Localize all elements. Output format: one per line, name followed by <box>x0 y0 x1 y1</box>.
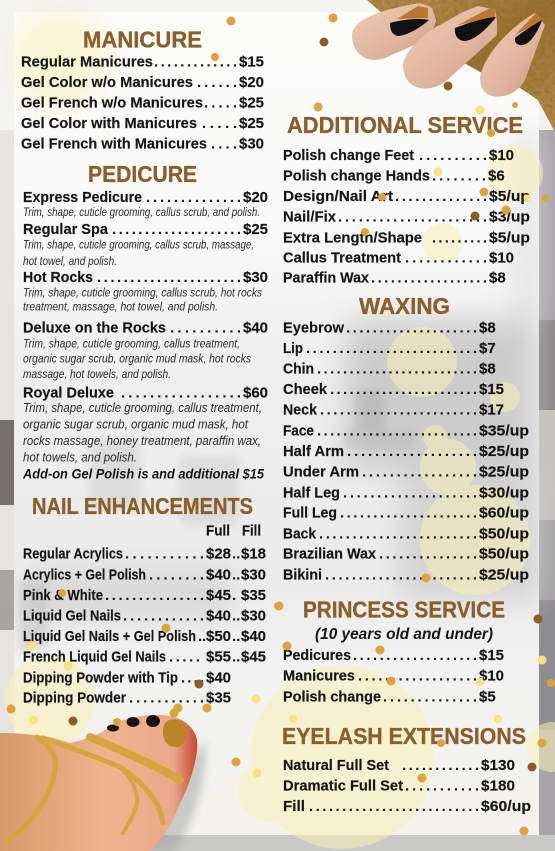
row: Paraffin Wax: Paraffin Wax <box>283 270 370 287</box>
row: Fill <box>283 798 531 815</box>
description: Hot Rocks: Trim, shape, cuticle grooming, callus scrub, hot rocks <box>23 286 262 300</box>
row: Royal Deluxe: Royal Deluxe <box>23 384 114 401</box>
row: Back: $50/up <box>479 525 529 542</box>
row: Regular Manicures: ............. <box>154 54 237 71</box>
row: Half Leg <box>283 484 529 501</box>
row: Pink & White: Pink & White <box>23 587 103 604</box>
row: Lip: Lip <box>283 340 303 357</box>
row: Fill: $60/up <box>481 798 531 815</box>
row: Dramatic Full Set: Dramatic Full Set <box>283 778 403 795</box>
description: Deluxe on the Rocks: massage, hot towels, and polish. <box>23 367 171 381</box>
row: Back <box>283 525 529 542</box>
list: manicure prices <box>21 54 264 153</box>
row: Polish change: $5 <box>479 688 496 705</box>
row: Face <box>283 422 529 439</box>
row: Full Leg: $60/up <box>479 505 529 522</box>
row: Liquid Gel Nails + Gel Polish: . <box>198 628 202 645</box>
row: Liquid Gel Nails: ............ <box>123 608 204 625</box>
row: Regular Manicures: $15 <box>239 54 264 71</box>
row: Dramatic Full Set: $180 <box>481 778 515 795</box>
row: Half Arm: Half Arm <box>283 443 344 460</box>
row: Brazilian Wax: Brazilian Wax <box>283 546 377 563</box>
row: Express Pedicure: $20 <box>243 189 268 206</box>
row: Gel Color w/o Manicures: ...... <box>197 74 237 91</box>
row: Liquid Gel Nails: $40 <box>206 608 231 625</box>
row: Deluxe on the Rocks: Deluxe on the Rocks <box>23 320 166 337</box>
row: Manicures: .................. <box>358 668 477 685</box>
row: Express Pedicure: .............. <box>146 189 241 206</box>
row: Design/Nail Art <box>283 188 530 205</box>
row: Gel French w/o Manicures: ..... <box>204 94 237 112</box>
column headers: Full and Fill: Fill <box>242 523 261 540</box>
heading: Eyelash Extensions: EYELASH EXTENSIONS <box>282 723 526 749</box>
row: Regular Spa: Regular Spa <box>23 221 109 238</box>
row: Acrylics + Gel Polish: $40 <box>206 566 231 583</box>
row: Neck: Neck <box>283 402 318 419</box>
row: Liquid Gel Nails <box>23 608 266 625</box>
row: Callus Treatment: $10 <box>489 250 514 267</box>
description: Royal Deluxe: Trim, shape, cuticle grooming, callus treatment, <box>23 400 262 415</box>
row: Cheek: ....................... <box>330 381 477 398</box>
photo shadows behind panel <box>18 130 539 650</box>
row: French Liquid Gel Nails: French Liquid Gel Nails <box>23 649 166 666</box>
row: Regular Manicures: Regular Manicures <box>21 54 153 71</box>
row: Liquid Gel Nails + Gel Polish: $40 <box>241 628 266 645</box>
row: Liquid Gel Nails: $30 <box>241 608 266 625</box>
row: Nail/Fix <box>283 209 530 226</box>
description: Regular Spa: hot towel, and polish. <box>23 254 117 268</box>
row: Natural Full Set <box>283 757 515 774</box>
row: Polish change Feet: Polish change Feet <box>283 147 414 164</box>
row: Bikini: $25/up <box>479 566 529 583</box>
row: Half Arm <box>283 443 529 460</box>
row: Eyebrow: $8 <box>479 319 496 336</box>
row: Design/Nail Art: $5/up <box>489 188 530 205</box>
row: Chin: ......................... <box>317 361 477 378</box>
row: Deluxe on the Rocks: .......... <box>170 320 241 337</box>
row: Fill: Fill <box>283 798 305 815</box>
row: Callus Treatment: ............ <box>405 250 487 267</box>
row: Chin: Chin <box>283 361 314 378</box>
row: Polish change <box>283 688 496 705</box>
note: add-on gel polish: Add-on Gel Polish is and additional $15 <box>22 465 264 481</box>
row: Gel Color with Manicures: Gel Color with Manicures <box>21 115 197 132</box>
column headers: Full and Fill: Full <box>206 523 230 540</box>
row: Half Leg: Half Leg <box>283 484 340 501</box>
row: Natural Full Set: ............ <box>402 757 479 774</box>
row: Nail/Fix: ...................... <box>338 209 487 226</box>
row: Under Arm: ................. <box>362 464 477 481</box>
row: Under Arm: $25/up <box>479 464 529 481</box>
row: Pink & White: $45 <box>206 587 231 604</box>
row: Polish change Hands: Polish change Hands <box>283 167 430 184</box>
description: Deluxe on the Rocks <box>23 336 251 381</box>
photo: foot in gold sandal <box>0 715 206 851</box>
row: Brazilian Wax: $50/up <box>479 546 529 563</box>
row: Under Arm <box>283 464 529 481</box>
row: Regular Spa: $25 <box>243 221 268 238</box>
row: Half Leg: .................... <box>343 484 477 501</box>
list: additional services <box>283 147 530 287</box>
row: Design/Nail Art: .............. <box>395 188 487 205</box>
row: Polish change Hands: ........ <box>432 167 486 184</box>
row: Dipping Powder with Tip: .... <box>181 669 204 686</box>
row: Paraffin Wax: $8 <box>489 270 506 287</box>
row: Bikini <box>283 566 529 583</box>
row: Neck: $17 <box>479 402 504 419</box>
row: Polish change Feet: .......... <box>419 147 487 164</box>
row: Gel French w/o Manicures: Gel French w/o Manicures <box>21 94 203 112</box>
gold straps <box>6 737 180 841</box>
row: Natural Full Set: Natural Full Set <box>283 757 389 774</box>
row: Hot Rocks: $30 <box>243 269 268 286</box>
row: Nail/Fix: $3/up <box>489 209 530 226</box>
row: Hot Rocks: Hot Rocks <box>23 269 93 286</box>
row: Dipping Powder with Tip: $40 <box>206 669 231 686</box>
row: Regular Acrylics: ........... <box>125 546 204 563</box>
row: Lip: .......................... <box>306 340 477 357</box>
row: Nail/Fix: Nail/Fix <box>283 209 337 226</box>
row: Acrylics + Gel Polish <box>23 566 266 583</box>
row: French Liquid Gel Nails: $55 <box>206 649 231 666</box>
row: Cheek <box>283 381 504 398</box>
row: Extra Length/Shape: $5/up <box>489 229 530 246</box>
row: Regular Spa <box>23 221 268 238</box>
row: Hot Rocks: ...................... <box>97 269 241 286</box>
row: Pedicures: Pedicures <box>283 647 351 664</box>
heading: Additional Service: ADDITIONAL SERVICE <box>287 112 523 138</box>
row: Full Leg: Full Leg <box>283 505 337 522</box>
list: pedicure services <box>22 189 268 481</box>
row: Acrylics + Gel Polish: $30 <box>241 566 266 583</box>
description: Royal Deluxe <box>23 400 262 465</box>
row: Brazilian Wax: ............... <box>379 546 477 563</box>
row: Royal Deluxe: $60 <box>243 384 268 401</box>
row: Full Leg: ..................... <box>340 505 477 522</box>
description: Deluxe on the Rocks: organic sugar scrub, organic mud mask, hot rocks <box>23 352 251 366</box>
row: Dipping Powder <box>23 690 231 707</box>
row: Dipping Powder: Dipping Powder <box>23 690 126 707</box>
toenails <box>107 715 187 747</box>
row: Regular Acrylics: $28 <box>206 546 231 563</box>
heading: Waxing: WAXING <box>359 293 450 319</box>
row: Dipping Powder with Tip: Dipping Powder with Tip <box>23 669 178 686</box>
heading: Nail Enhancements: NAIL ENHANCEMENTS <box>32 493 253 519</box>
row: Regular Acrylics: $18 <box>241 546 266 563</box>
description: Deluxe on the Rocks: Trim, shape, cuticle grooming, callus treatment, <box>23 336 240 350</box>
row: Design/Nail Art: Design/Nail Art <box>283 188 393 205</box>
row: Regular Acrylics: Regular Acrylics <box>23 546 123 563</box>
photo: manicured hand with gold yarn <box>352 0 555 132</box>
row: Royal Deluxe: ................. <box>121 384 241 401</box>
row: Express Pedicure: Express Pedicure <box>23 189 142 206</box>
row: Acrylics + Gel Polish: Acrylics + Gel Polish <box>23 566 146 583</box>
row: Brazilian Wax <box>283 546 529 563</box>
row: Bikini: ....................... <box>325 566 477 583</box>
row: Liquid Gel Nails: Liquid Gel Nails <box>23 608 121 625</box>
row: Natural Full Set: $130 <box>481 757 515 774</box>
row: Paraffin Wax <box>283 270 506 287</box>
row: Pedicures: ................... <box>353 647 477 664</box>
row: Dramatic Full Set <box>283 778 515 795</box>
row: Face: $35/up <box>479 422 529 439</box>
row: Polish change Hands: $6 <box>488 167 505 184</box>
gold yarn over finger bases <box>418 0 555 132</box>
row: Callus Treatment: Callus Treatment <box>283 250 401 267</box>
row: Liquid Gel Nails + Gel Polish: . <box>202 628 206 645</box>
row: Gel French with Manicures: Gel French with Manicures <box>21 136 207 153</box>
row: Gel French w/o Manicures: $25 <box>239 94 264 112</box>
row: Regular Spa: .................... <box>112 221 241 238</box>
list: eyelash extensions <box>283 757 531 815</box>
row: Liquid Gel Nails + Gel Polish: Liquid Gel Nails + Gel Polish <box>23 628 196 645</box>
row: Eyebrow: .................... <box>346 319 477 336</box>
row: Polish change Feet <box>283 147 514 164</box>
description: Express Pedicure: Trim, shape, cuticle grooming, callus scrub, and polish. <box>23 205 260 219</box>
row: Dramatic Full Set: ........... <box>405 778 479 795</box>
row: Polish change: Polish change <box>283 688 381 705</box>
row: Regular Manicures <box>21 54 264 71</box>
row: Fill: .......................... <box>309 798 479 815</box>
row: Pink & White: . <box>232 587 236 604</box>
row: French Liquid Gel Nails: ..... <box>169 649 200 666</box>
row: Dipping Powder: $35 <box>206 690 231 707</box>
row: Pink & White: ............... <box>105 587 204 604</box>
description: Royal Deluxe: organic sugar scrub, organic mud mask, hot <box>23 417 249 432</box>
row: Full Leg <box>283 505 529 522</box>
row: Gel Color w/o Manicures: $20 <box>239 74 264 91</box>
row: Half Leg: $30/up <box>479 484 529 501</box>
row: Face: ......................... <box>317 422 477 439</box>
row: Polish change Feet: $10 <box>489 147 514 164</box>
row: Manicures <box>283 668 504 685</box>
description: Royal Deluxe: hot towels, and polish. <box>23 450 137 465</box>
row: Acrylics + Gel Polish: ........ <box>149 566 204 583</box>
description: Hot Rocks <box>23 286 262 314</box>
row: Under Arm: Under Arm <box>283 464 359 481</box>
row: Liquid Gel Nails: .. <box>232 608 240 625</box>
list: waxing prices <box>283 319 529 583</box>
row: Polish change: .............. <box>383 688 477 705</box>
row: French Liquid Gel Nails: $45 <box>241 649 266 666</box>
row: Gel Color with Manicures: $25 <box>239 115 264 132</box>
row: Acrylics + Gel Polish: .. <box>232 566 240 583</box>
row: Eyebrow <box>283 319 496 336</box>
description: Royal Deluxe: rocks massage, honey treatment, paraffin wax, <box>23 433 261 448</box>
description: Regular Spa <box>23 238 254 268</box>
row: Pedicures <box>283 647 504 664</box>
row: Hot Rocks <box>23 269 268 286</box>
list: nail enhancement prices <box>23 546 266 707</box>
row: Deluxe on the Rocks: $40 <box>243 320 268 337</box>
row: Manicures: Manicures <box>283 668 355 685</box>
row: Gel French with Manicures: $30 <box>239 136 264 153</box>
row: Back: ........................ <box>319 525 477 542</box>
row: French Liquid Gel Nails: .. <box>232 649 240 666</box>
row: Regular Acrylics <box>23 546 266 563</box>
row: Extra Length/Shape: Extra Length/Shape <box>283 229 422 246</box>
heading: Princess Service: PRINCESS SERVICE <box>303 596 505 622</box>
row: Lip: $7 <box>479 340 496 357</box>
row: Pedicures: $15 <box>479 647 504 664</box>
column headers: Full and Fill <box>206 523 261 540</box>
row: Extra Length/Shape: ......... <box>432 229 487 246</box>
row: Deluxe on the Rocks <box>23 320 268 337</box>
row: Half Arm: ................... <box>347 443 477 460</box>
row: Royal Deluxe <box>23 384 268 401</box>
row: French Liquid Gel Nails <box>23 649 266 666</box>
heading: Pedicure: PEDICURE <box>88 161 197 187</box>
row: Liquid Gel Nails + Gel Polish: .. <box>232 628 240 645</box>
list: princess services <box>283 647 504 705</box>
row: Back: Back <box>283 525 317 542</box>
row: Express Pedicure <box>23 189 268 206</box>
row: Liquid Gel Nails + Gel Polish: $50 <box>206 628 231 645</box>
row: Regular Acrylics: .. <box>232 546 240 563</box>
row: Dipping Powder: ........... <box>129 690 204 707</box>
subheading: age limit: (10 years old and under) <box>315 626 493 643</box>
row: Extra Length/Shape <box>283 229 530 246</box>
row: Cheek: $15 <box>479 381 504 398</box>
row: Eyebrow: Eyebrow <box>283 319 344 336</box>
row: Half Arm: $25/up <box>479 443 529 460</box>
row: Paraffin Wax: .................. <box>371 270 487 287</box>
heading: Manicure: MANICURE <box>83 26 202 52</box>
row: Pink & White <box>23 587 266 604</box>
row: Callus Treatment <box>283 250 514 267</box>
row: Gel French with Manicures: .... <box>211 136 237 153</box>
row: Gel Color w/o Manicures: Gel Color w/o Manicures <box>21 74 193 91</box>
row: Manicures: $10 <box>479 668 504 685</box>
description: Regular Spa: Trim, shape, cuticle grooming, callus scrub, massage, <box>23 238 254 252</box>
row: Chin: $8 <box>479 361 496 378</box>
row: Cheek: Cheek <box>283 381 328 398</box>
row: Pink & White: $35 <box>241 587 266 604</box>
row: Bikini: Bikini <box>283 566 322 583</box>
row: Gel Color with Manicures: ..... <box>202 115 237 132</box>
black nails <box>390 6 542 45</box>
description: Hot Rocks: treatment, massage, hot towel, and polish. <box>23 300 218 314</box>
row: Neck: ........................ <box>320 402 477 419</box>
row: Face: Face <box>283 422 314 439</box>
row: Polish change Hands <box>283 167 505 184</box>
